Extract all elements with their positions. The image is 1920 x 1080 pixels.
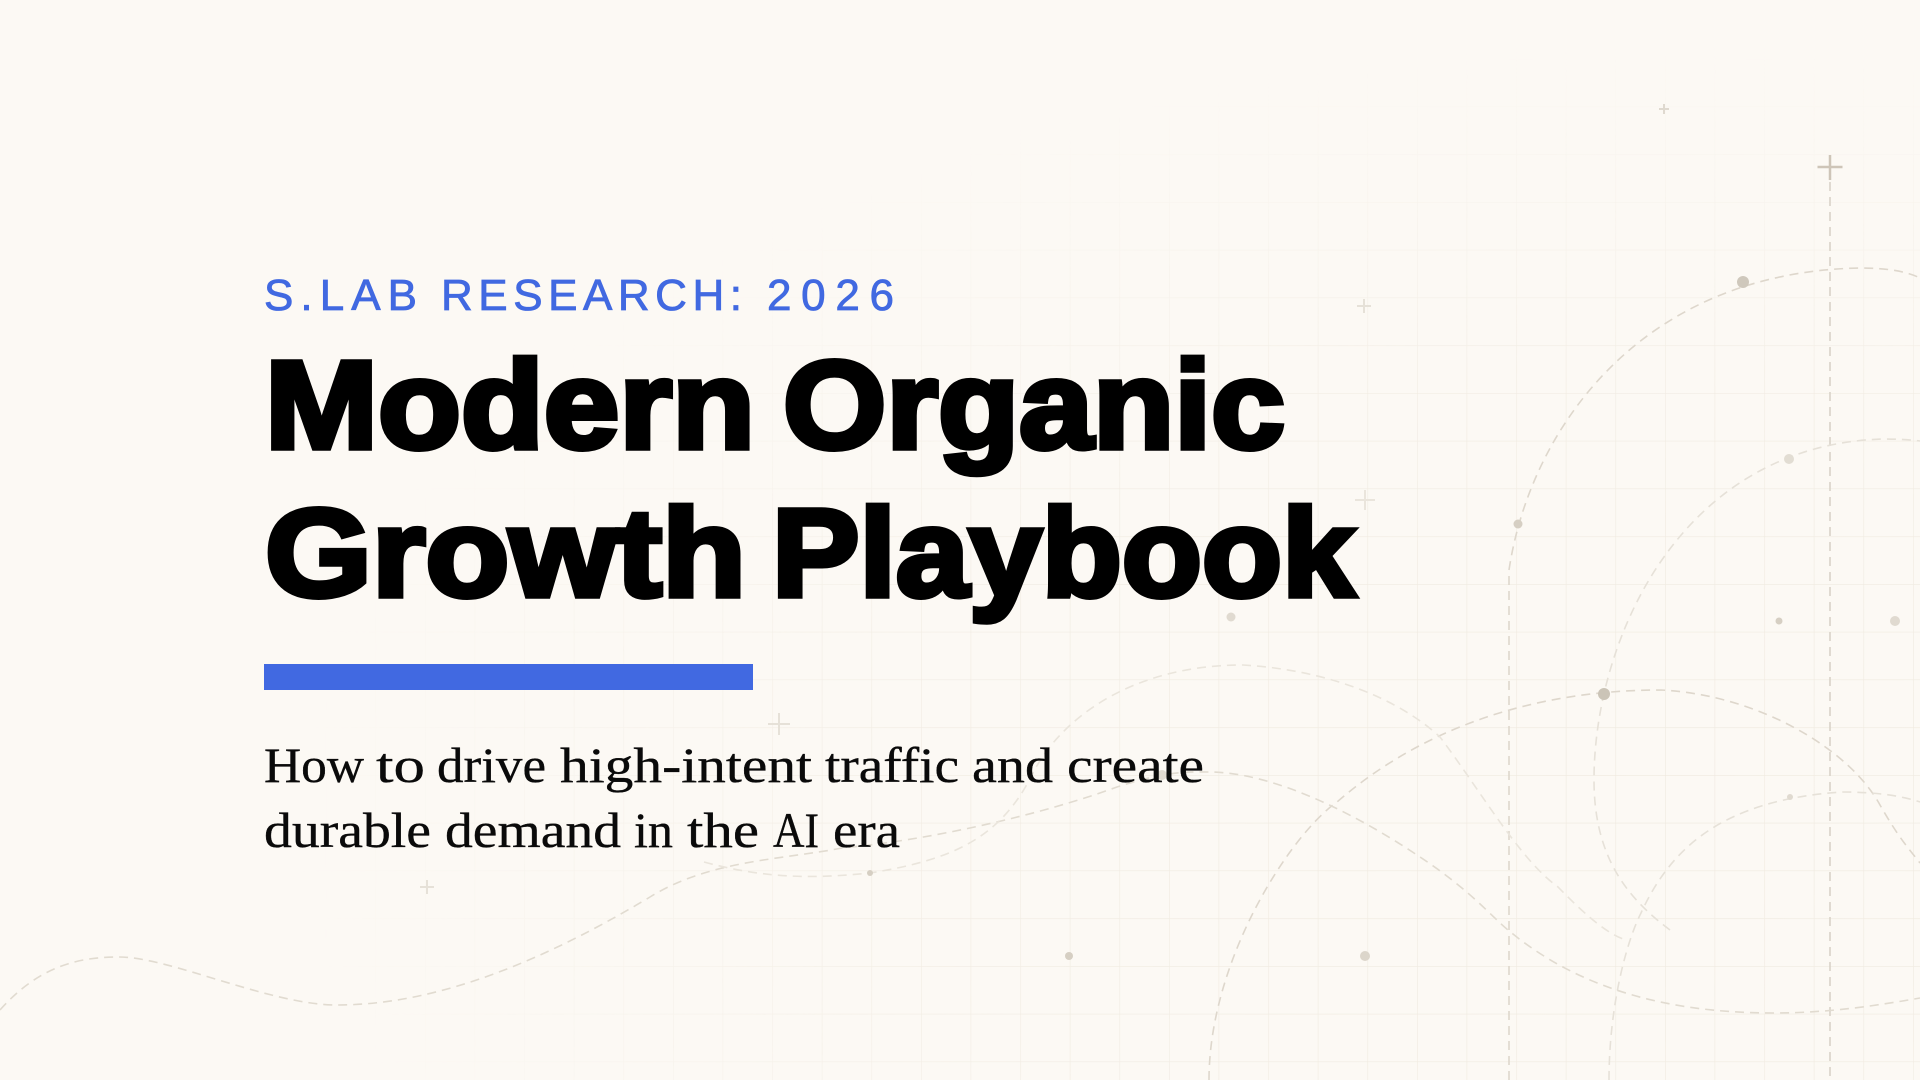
- eyebrow label: [264, 271, 894, 320]
- subtitle: durable: [264, 802, 431, 858]
- subtitle: AI: [773, 802, 819, 858]
- title: Playbook: [772, 484, 1355, 623]
- subtitle: create: [1067, 737, 1204, 793]
- accent bar: [264, 664, 753, 690]
- eyebrow label: S.LAB: [264, 271, 417, 320]
- decorative nodes: [867, 276, 1900, 961]
- subtitle: traffic: [825, 737, 959, 793]
- subtitle: [264, 737, 1204, 858]
- subtitle: to: [376, 737, 425, 793]
- background grid: [588, 206, 1920, 1080]
- plus markers: [420, 104, 1842, 894]
- subtitle: high-intent: [560, 737, 812, 793]
- eyebrow label: RESEARCH:: [441, 271, 742, 320]
- title: Organic: [783, 336, 1285, 475]
- subtitle: demand: [445, 802, 621, 858]
- subtitle: How: [264, 737, 364, 793]
- subtitle: drive: [437, 737, 546, 793]
- subtitle: the: [687, 802, 759, 858]
- title: Modern: [265, 336, 755, 475]
- subtitle: and: [972, 737, 1053, 793]
- title: Growth: [265, 484, 746, 623]
- subtitle: in: [634, 802, 673, 858]
- subtitle: era: [833, 802, 900, 858]
- eyebrow label: 2026: [767, 271, 894, 320]
- title: [265, 336, 1355, 623]
